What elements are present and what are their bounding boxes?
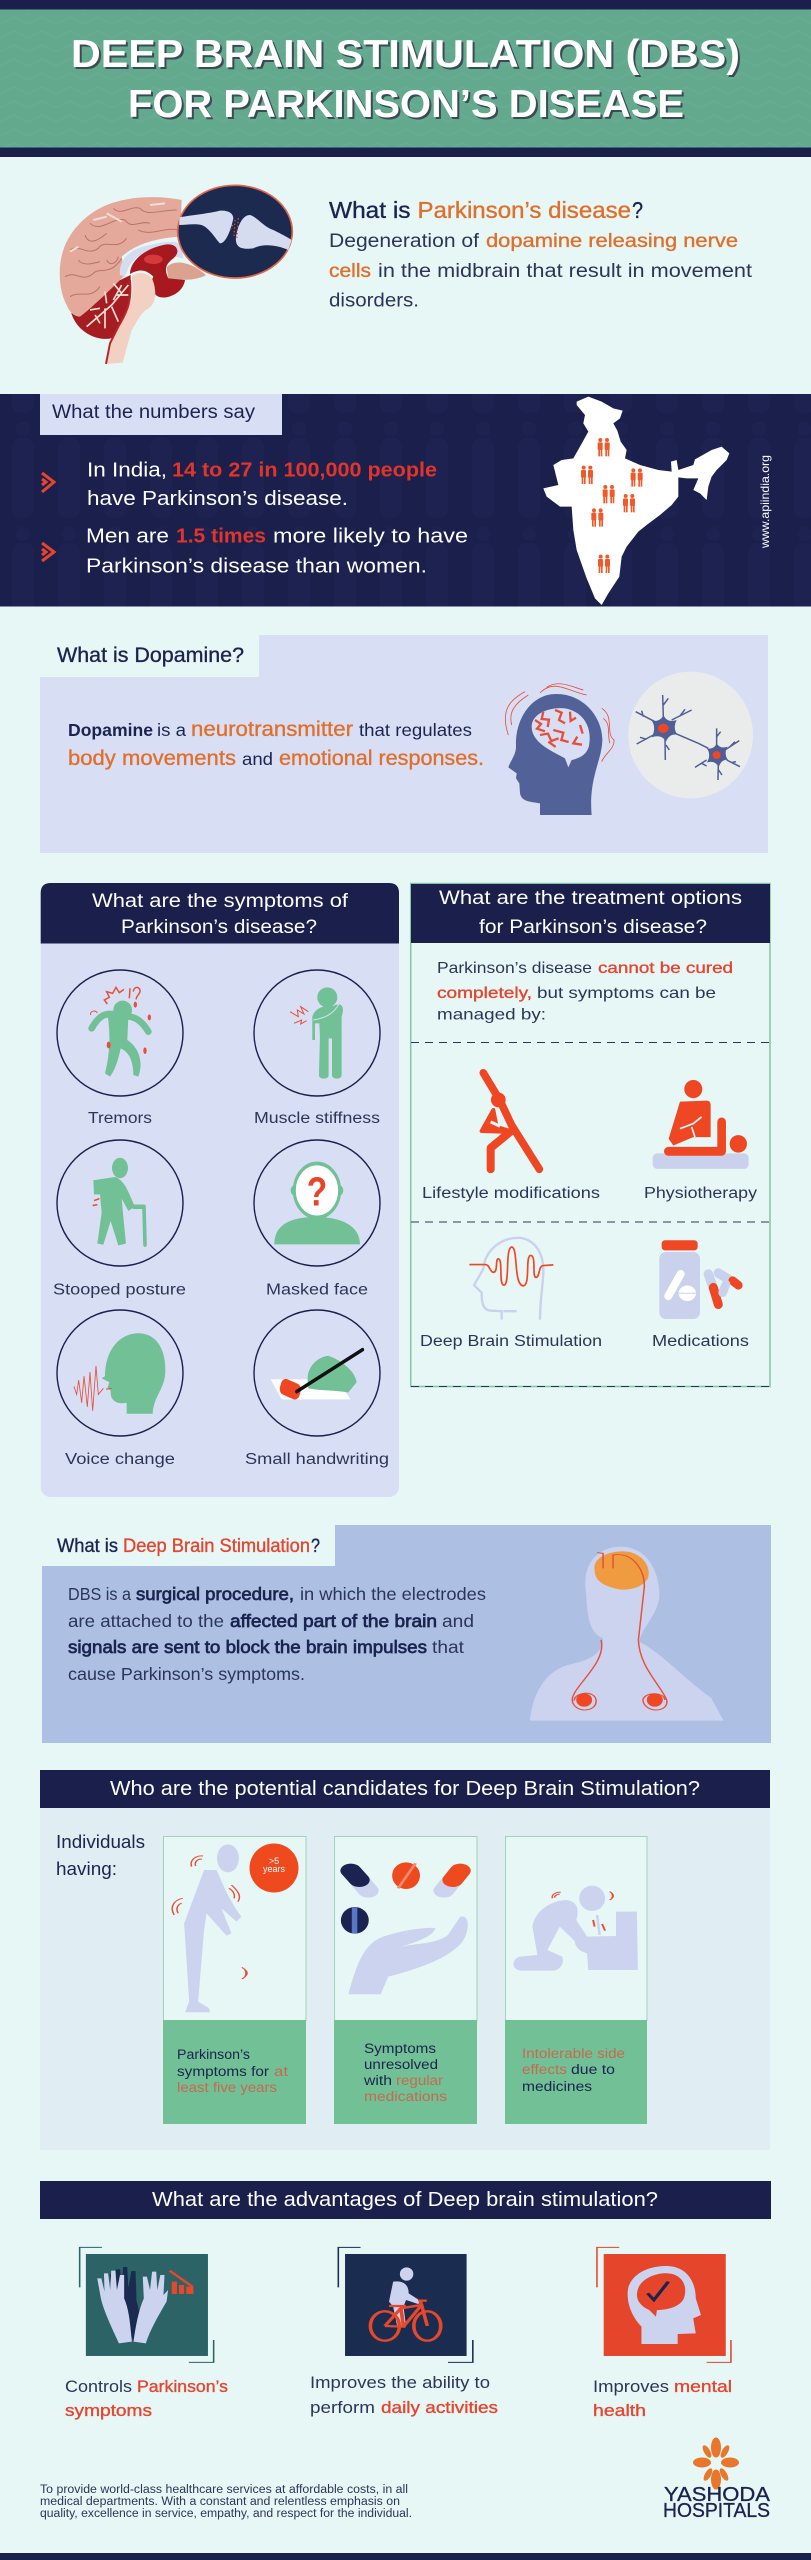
icon: muscle stiffness — [290, 987, 343, 1079]
remaining symptom icons — [74, 1158, 363, 1414]
card: five years of symptoms — [163, 1836, 306, 2124]
icon: head with brain and neurons — [505, 672, 753, 815]
treatment intro: cannot be cured — [598, 960, 733, 977]
illustration: brain with synapse — [60, 185, 292, 364]
icon: physiotherapy — [653, 1080, 749, 1169]
card: five years of symptoms: least five years — [177, 2080, 277, 2095]
panel: advantages — [40, 2181, 771, 2420]
icon: small handwriting — [271, 1350, 363, 1401]
illustration: implanted electrodes — [530, 1547, 723, 1721]
footer mission statement: quality, excellence in service, empathy, and respect for the individual. — [40, 2508, 412, 2520]
card: unresolved with medications: medications — [364, 2089, 447, 2104]
icon: lifestyle modifications — [482, 1073, 539, 1169]
text: individuals having: Individuals — [56, 1832, 145, 1852]
logo: Yashoda Hospitals: YASHODA — [664, 2484, 771, 2506]
statistic: prevalence in India — [87, 460, 437, 510]
DBS description: are attached to the — [68, 1611, 224, 1631]
advantage captions: daily activities — [381, 2398, 498, 2417]
DBS description: that — [432, 1637, 464, 1657]
text block: what is Parkinson's disease: cells — [329, 261, 371, 282]
DBS description: signals are sent to block the brain impulses — [68, 1637, 427, 1657]
advantage captions — [65, 2373, 732, 2420]
text: individuals having: having: — [56, 1859, 117, 1879]
treatment intro: managed by: — [437, 1006, 546, 1024]
panel: what is dopamine — [40, 635, 768, 853]
panel: what the numbers say — [0, 394, 811, 606]
dopamine definition: emotional responses. — [279, 747, 484, 770]
card: five years of symptoms: symptoms for — [177, 2064, 270, 2079]
card: intolerable side effects — [505, 1836, 647, 2124]
symptom labels: Stooped posture — [53, 1282, 186, 1298]
panel: what is dopamine: What is Dopamine? — [57, 644, 244, 667]
panel: potential candidates: Who are the potential candidates for Deep Brain Stimulation? — [110, 1778, 700, 1800]
advantage icons — [80, 2247, 731, 2362]
advantage captions: mental — [674, 2377, 732, 2396]
title banner: FOR PARKINSON’S DISEASE — [128, 83, 684, 126]
card: unresolved with medications — [334, 1836, 477, 2124]
card: unresolved with medications: with — [363, 2073, 392, 2088]
text block: what is Parkinson's disease: What is — [329, 197, 410, 223]
text block: what is Parkinson's disease: ? — [632, 197, 643, 223]
statistic: men versus women: 1.5 times — [176, 526, 266, 548]
treatment labels: Lifestyle modifications — [422, 1185, 600, 1202]
DBS description — [68, 1584, 486, 1684]
panel: what is deep brain stimulation — [42, 1525, 771, 1743]
symptom labels: Small handwriting — [245, 1451, 389, 1468]
text block: what is Parkinson's disease: in the midbrain that result in movement — [378, 261, 753, 282]
advantage captions: Improves the ability to — [310, 2373, 490, 2392]
DBS description: affected part of the brain — [230, 1611, 437, 1631]
symptom labels: Tremors — [88, 1110, 152, 1127]
DBS description: and — [442, 1611, 474, 1631]
panel: what the numbers say: What the numbers say — [52, 402, 256, 423]
icon: tremors — [91, 987, 151, 1077]
dopamine definition: that regulates — [359, 720, 472, 740]
panel: treatment options — [411, 884, 770, 1386]
card: five years of symptoms: >5 — [269, 1856, 279, 1866]
logo: Yashoda Hospitals: HOSPITALS — [663, 2500, 770, 2522]
advantage captions: Improves — [593, 2377, 669, 2396]
panel: treatment options: for Parkinson’s disease? — [479, 917, 707, 938]
icon: person on bicycle — [338, 2247, 473, 2362]
title banner: DEEP BRAIN STIMULATION (DBS) — [71, 33, 740, 76]
statistic: prevalence in India: 14 to 27 in 100,000 people — [172, 460, 437, 482]
panel: what is deep brain stimulation: ? — [311, 1536, 320, 1557]
treatment intro: but symptoms can be — [537, 985, 716, 1002]
icon: voice change — [74, 1333, 165, 1414]
panel: symptoms — [41, 883, 399, 1497]
statistic: prevalence in India: In India, — [87, 460, 167, 482]
text: individuals having — [56, 1832, 145, 1879]
symptom labels — [53, 1110, 389, 1468]
icon: head with checked brain — [597, 2247, 731, 2362]
card: five years of symptoms: years — [263, 1864, 286, 1874]
card: intolerable side effects: Intolerable side — [522, 2046, 625, 2061]
treatment labels: Medications — [652, 1333, 749, 1350]
symptom labels: Masked face — [266, 1282, 368, 1298]
icon: stooped person with tremor — [172, 1844, 247, 2012]
symptom labels: Voice change — [65, 1451, 175, 1468]
icon: medications — [659, 1240, 738, 1319]
dopamine definition: is a — [157, 720, 186, 740]
icon: bullet chevron two — [42, 543, 54, 561]
website credit: www.apiindia.org — [758, 455, 772, 549]
card: intolerable side effects: due to — [571, 2062, 615, 2077]
dopamine definition: body movements — [68, 747, 236, 770]
logo: Yashoda Hospitals — [663, 2438, 771, 2522]
treatment intro: Parkinson’s disease — [437, 960, 592, 977]
symptom icon rings — [57, 970, 380, 1436]
advantage captions: health — [593, 2401, 646, 2420]
DBS description: in which the electrodes — [300, 1584, 486, 1604]
card: five years of symptoms: Parkinson’s — [177, 2047, 250, 2062]
card: five years of symptoms: at — [274, 2064, 288, 2079]
symptom labels: Muscle stiffness — [254, 1110, 380, 1127]
advantage captions: Controls — [65, 2377, 132, 2396]
panel: treatment options: What are the treatment options — [439, 888, 742, 909]
panel: symptoms: What are the symptoms of — [92, 891, 349, 912]
footer mission statement: To provide world-class healthcare services at affordable costs, in all — [40, 2484, 408, 2496]
icon: masked face — [274, 1163, 360, 1244]
footer mission statement — [40, 2484, 412, 2520]
dopamine definition: Dopamine — [68, 720, 153, 740]
statistic: men versus women: Men are — [86, 526, 169, 548]
treatment labels: Physiotherapy — [644, 1185, 757, 1202]
advantage captions: symptoms — [65, 2401, 152, 2420]
treatment labels: Deep Brain Stimulation — [420, 1333, 602, 1350]
panel: what is deep brain stimulation: Deep Brain Stimulation — [123, 1536, 310, 1557]
treatment labels — [420, 1185, 757, 1350]
card: unresolved with medications: unresolved — [364, 2057, 438, 2072]
text block: what is Parkinson's disease: Parkinson’s disease — [418, 197, 631, 223]
text block: what is Parkinson's disease: Degeneration of — [329, 231, 480, 252]
card: unresolved with medications: Symptoms — [364, 2041, 436, 2056]
card: intolerable side effects: medicines — [522, 2079, 592, 2094]
statistic: men versus women — [86, 526, 468, 578]
treatment intro: completely, — [437, 985, 532, 1002]
card: unresolved with medications: regular — [396, 2073, 444, 2088]
statistic: men versus women: more likely to have — [273, 526, 468, 548]
icon: masked face: ? — [307, 1168, 327, 1214]
card: intolerable side effects: effects — [522, 2062, 567, 2077]
india map — [543, 397, 729, 605]
text block: what is Parkinson's disease — [329, 197, 753, 312]
panel: potential candidates — [40, 1770, 770, 2150]
statistic: prevalence in India: have Parkinson’s disease. — [87, 488, 348, 510]
panel: symptoms: Parkinson’s disease? — [121, 917, 317, 938]
DBS description: DBS is a — [68, 1584, 131, 1604]
dopamine definition — [68, 718, 484, 770]
treatment icons — [469, 1073, 749, 1320]
icon: bullet chevron one — [42, 473, 54, 492]
advantage captions: perform — [310, 2398, 375, 2417]
treatment intro — [437, 960, 733, 1024]
icon: hand and pills — [341, 1862, 468, 1994]
text block: what is Parkinson's disease: disorders. — [329, 290, 419, 312]
dopamine definition: neurotransmitter — [191, 718, 353, 741]
dopamine definition: and — [242, 749, 273, 769]
statistic: men versus women: Parkinson’s disease than women. — [86, 556, 427, 578]
icon: stooped posture — [93, 1158, 145, 1246]
panel: what is deep brain stimulation: What is — [57, 1536, 118, 1557]
title banner — [0, 0, 811, 157]
DBS description: surgical procedure, — [136, 1584, 294, 1604]
advantage captions: Parkinson’s — [137, 2377, 228, 2396]
icon: deep brain stimulation — [469, 1238, 553, 1320]
DBS description: cause Parkinson’s symptoms. — [68, 1664, 305, 1684]
icon: hands with falling chart — [80, 2247, 214, 2362]
panel: advantages: What are the advantages of Deep brain stimulation? — [152, 2189, 658, 2211]
footer mission statement: medical departments. With a constant and relentless emphasis on — [40, 2496, 400, 2508]
icon: person vomiting at toilet — [513, 1886, 638, 1971]
text block: what is Parkinson's disease: dopamine releasing nerve — [486, 231, 738, 252]
